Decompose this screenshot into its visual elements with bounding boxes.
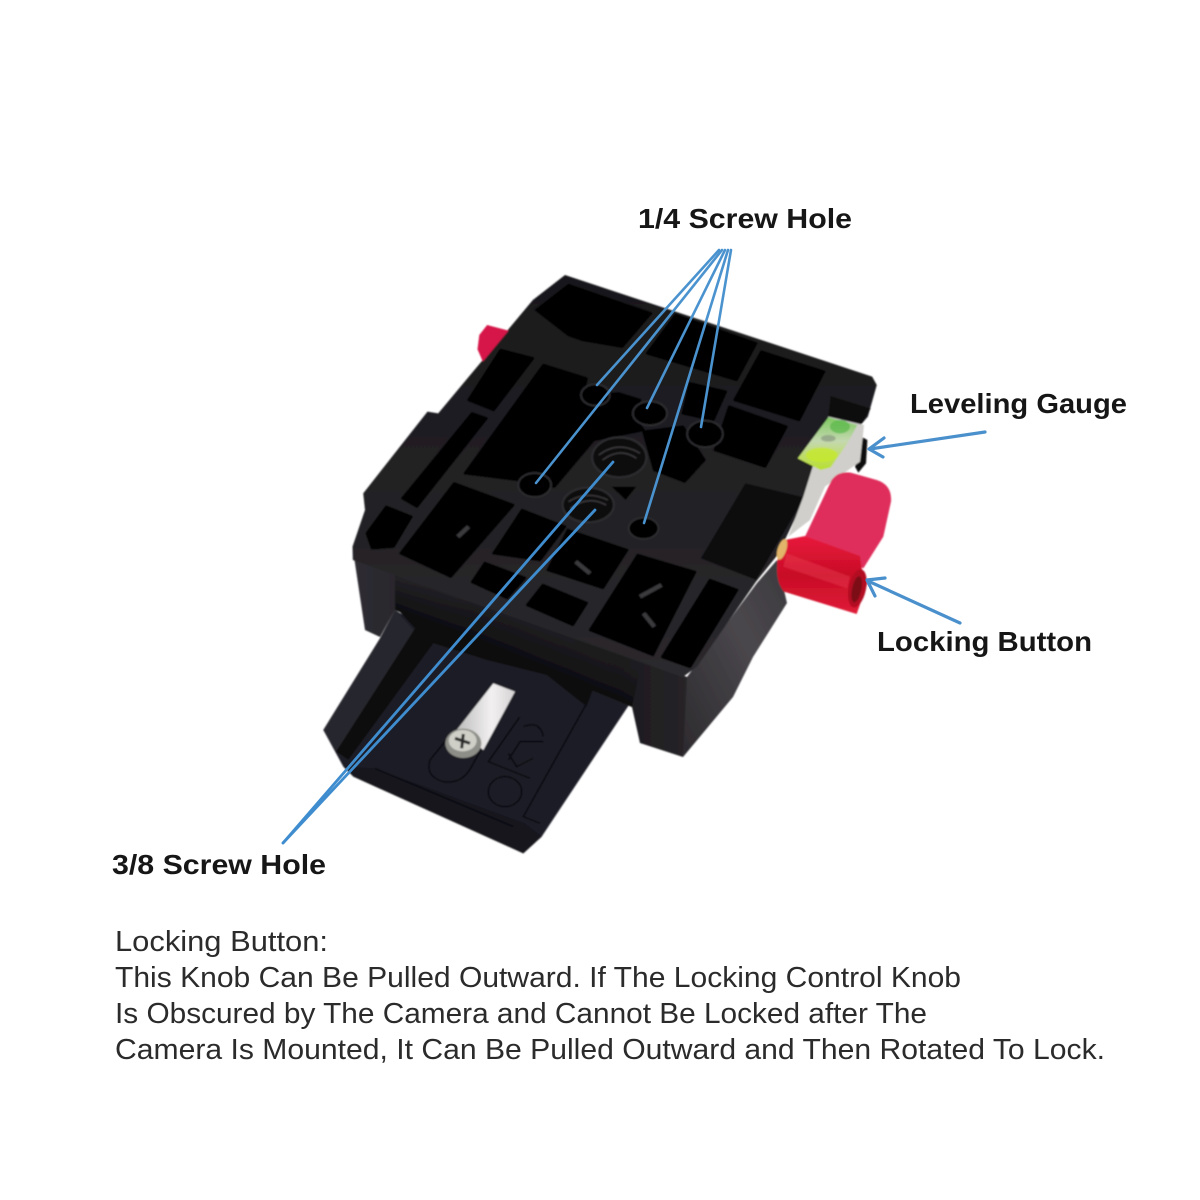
front wall [353, 550, 689, 757]
label: 3/8 screw hole: 3/8 Screw Hole [112, 849, 326, 880]
description text block: This Knob Can Be Pulled Outward. If The Locking Control Knob [115, 962, 961, 994]
label: locking button: Locking Button [877, 626, 1092, 657]
description text block: Camera Is Mounted, It Can Be Pulled Outward and Then Rotated To Lock. [115, 1034, 1105, 1066]
arrow: locking button [867, 578, 960, 623]
leveling gauge and knob [775, 396, 891, 614]
top face with cells [352, 275, 877, 677]
black clip [855, 437, 867, 473]
metal strip [457, 683, 515, 750]
dark rectangle recess [701, 483, 804, 580]
bubble vial [798, 417, 857, 470]
silver gauge housing [788, 417, 864, 537]
red barrel [777, 536, 867, 614]
body side [683, 560, 787, 757]
small screw holes [518, 384, 723, 539]
description text block: Locking Button: [115, 926, 328, 958]
description text block [115, 926, 1105, 1066]
threaded holes [562, 437, 646, 522]
left red pin [477, 325, 509, 362]
product photo: quick release plate [323, 275, 891, 853]
arrow: leveling gauge [869, 432, 985, 457]
sliding plate [323, 607, 630, 853]
cell interior highlights [458, 527, 661, 627]
knob hole [845, 568, 870, 609]
label: 1/4 screw hole: 1/4 Screw Hole [638, 203, 852, 234]
pointer lines: 1/4 screw holes [536, 250, 731, 523]
slot and embossed marks [375, 703, 587, 827]
pointer lines: 3/8 screw holes [283, 462, 613, 843]
red paddle [805, 472, 891, 568]
label: leveling gauge: Leveling Gauge [910, 388, 1127, 419]
screw [445, 729, 481, 758]
description text block: Is Obscured by The Camera and Cannot Be Locked after The [115, 998, 927, 1030]
wall shadow [395, 575, 640, 707]
